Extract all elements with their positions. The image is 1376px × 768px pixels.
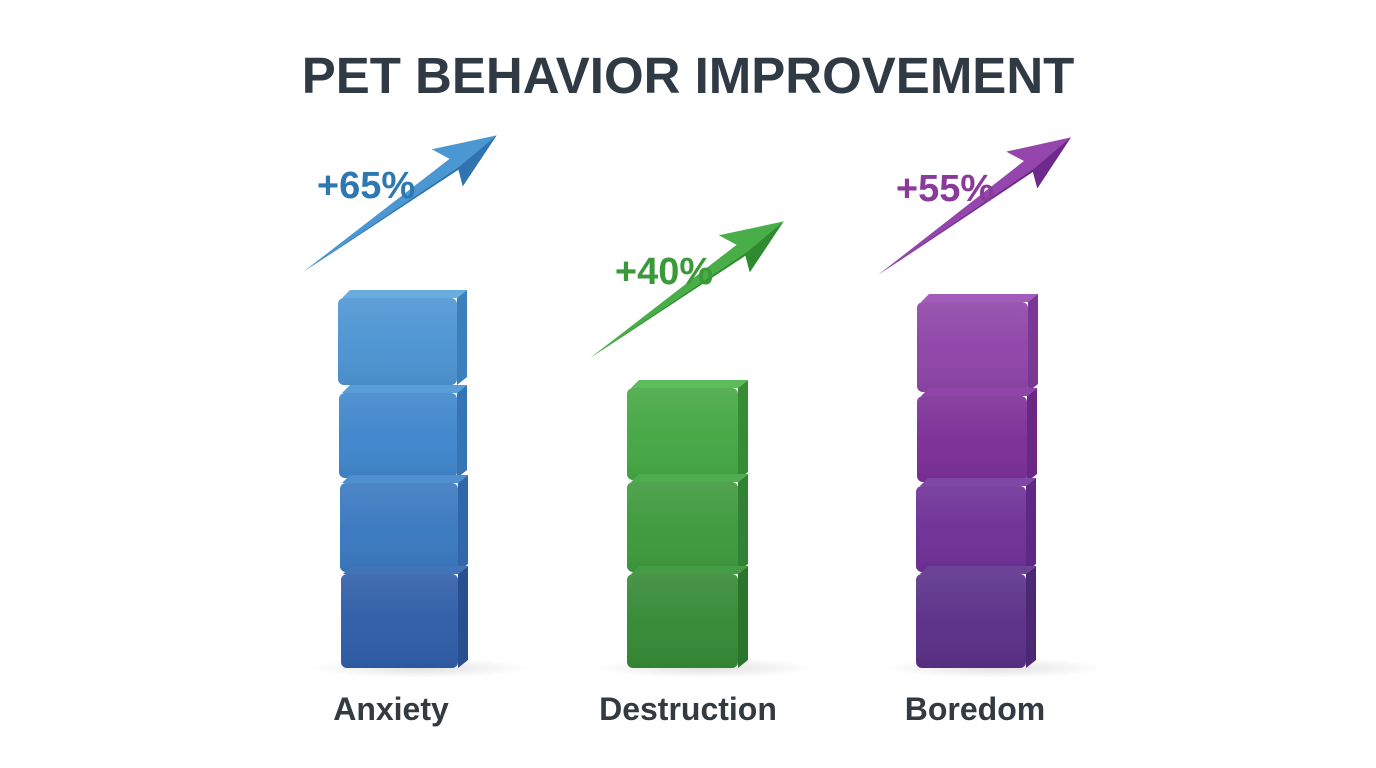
label: +55%: +55% bbox=[896, 168, 994, 210]
arrow: green bbox=[575, 200, 796, 376]
bar: anxiety (blue stack) bbox=[338, 290, 468, 668]
title: PET BEHAVIOR IMPROVEMENT bbox=[302, 47, 1074, 104]
category: Anxiety: Anxiety bbox=[333, 691, 449, 727]
arrow: purple bbox=[863, 116, 1084, 293]
shadows bbox=[310, 658, 530, 678]
label: +40%: +40% bbox=[615, 251, 713, 293]
arrow: blue bbox=[288, 114, 509, 290]
category: Boredom: Boredom bbox=[905, 691, 1045, 727]
category: Destruction: Destruction bbox=[599, 691, 777, 727]
bar: destruction (green stack) bbox=[627, 380, 748, 668]
bar: boredom (purple stack) bbox=[916, 294, 1038, 668]
label: +65%: +65% bbox=[317, 165, 415, 207]
